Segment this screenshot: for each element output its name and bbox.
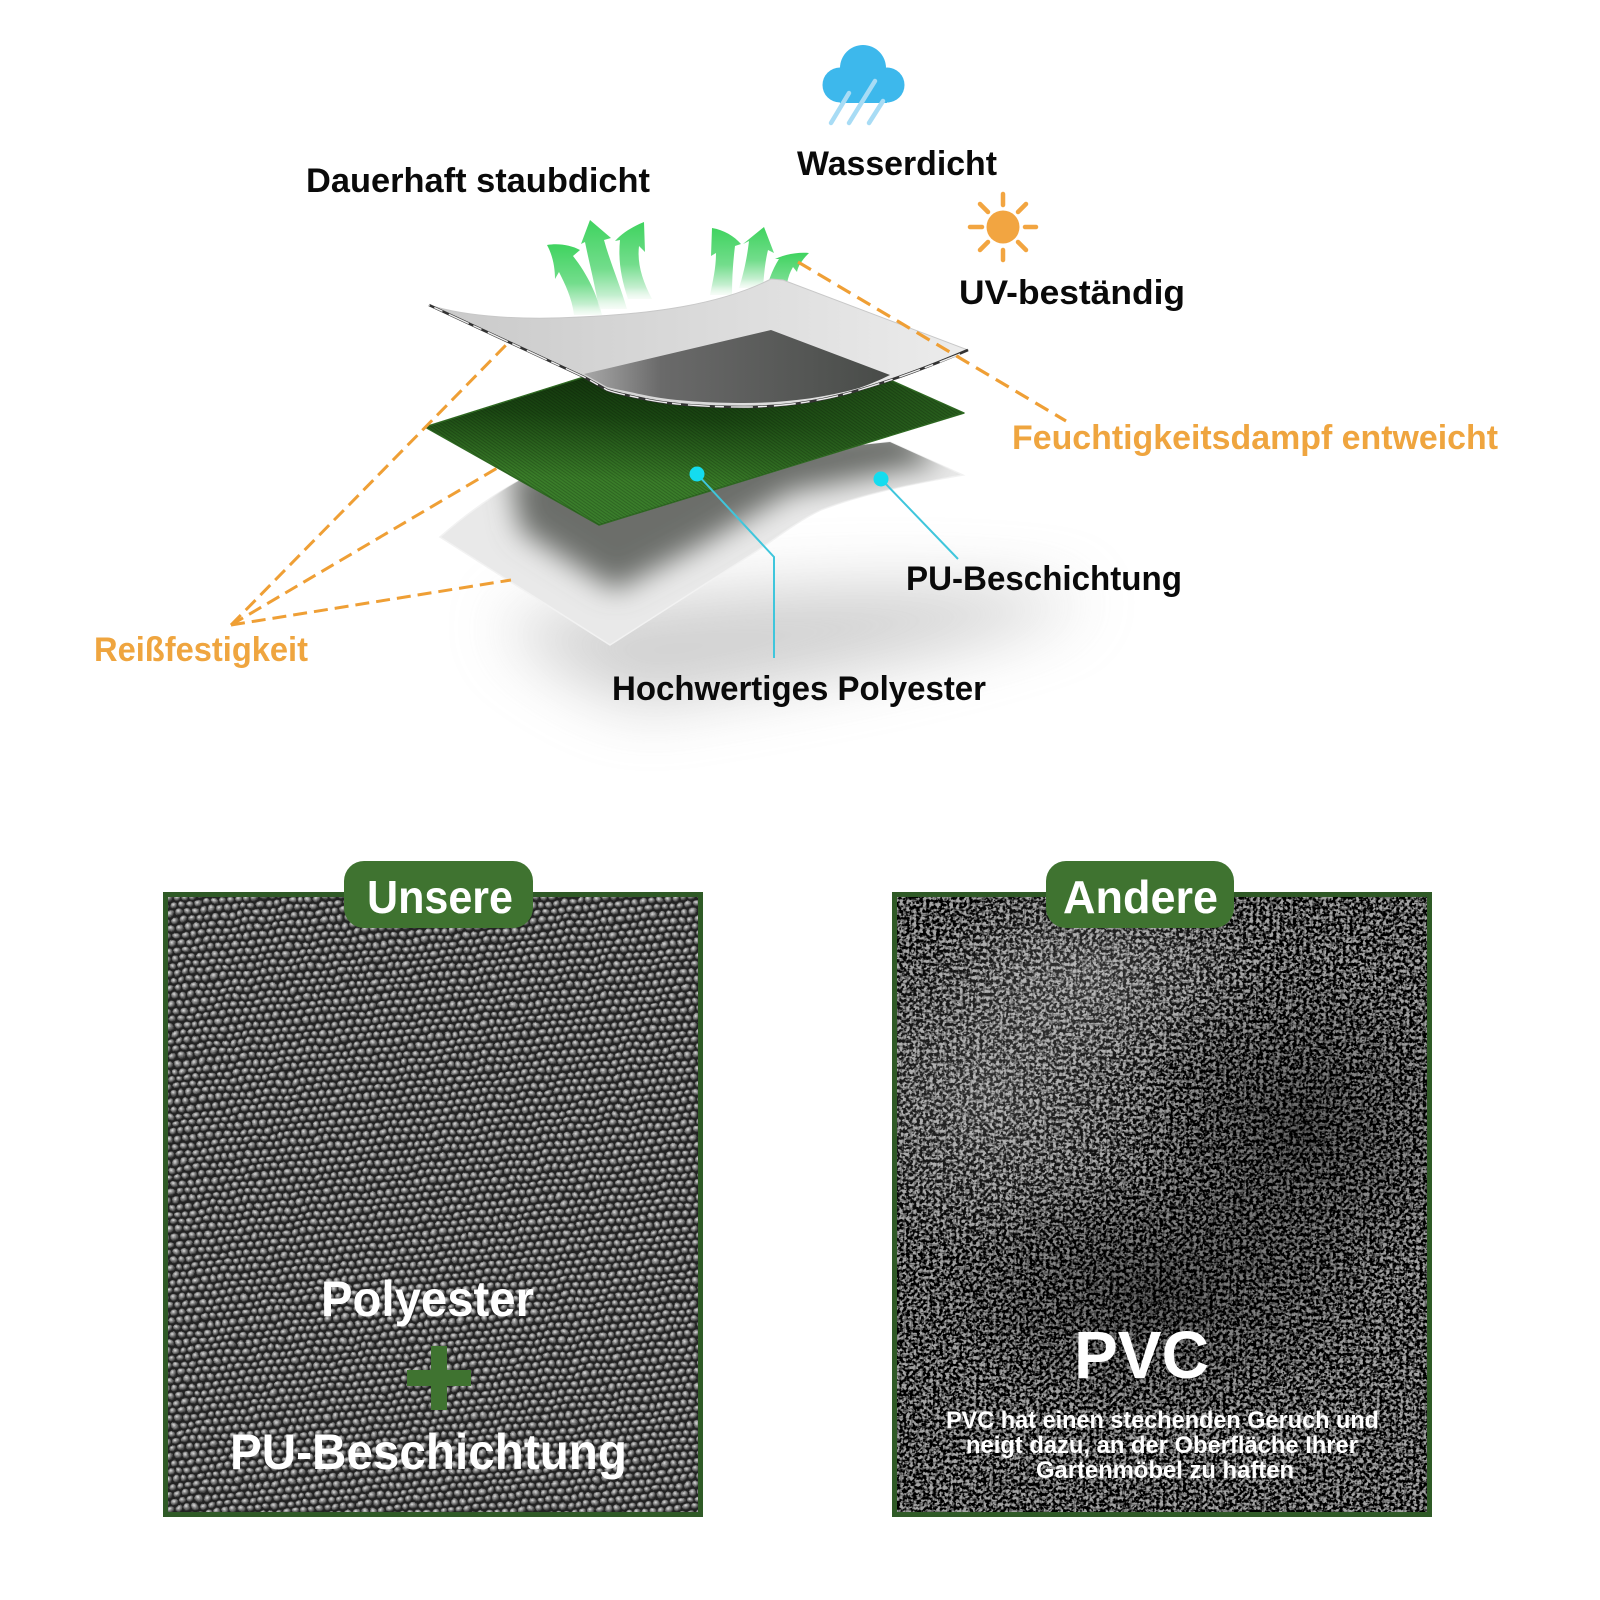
text: PVC description: PVC hat einen stechenden Geruch und	[946, 1407, 1379, 1434]
tag: Andere: Andere	[1063, 871, 1218, 923]
text: PU-Beschichtung: PU-Beschichtung	[230, 1424, 627, 1480]
layer: top waterproof membrane sheet	[429, 279, 968, 407]
green vapor arrows	[547, 220, 809, 315]
cyan pointer: PU coating	[874, 472, 958, 559]
text: PVC: PVC	[1074, 1318, 1209, 1393]
icon: sun	[970, 194, 1036, 260]
label: Hochwertiges Polyester: Hochwertiges Polyester	[612, 670, 986, 708]
tag: Unsere	[344, 861, 533, 928]
text: PVC description: neigt dazu, an der Oberfläche Ihrer	[966, 1432, 1358, 1459]
panel: Andere	[892, 861, 1432, 1517]
label: UV-beständig: UV-beständig	[959, 274, 1185, 312]
label: Feuchtigkeitsdampf entweicht: Feuchtigkeitsdampf entweicht	[1012, 419, 1498, 457]
text: PVC description	[946, 1407, 1379, 1484]
tag: Andere	[1046, 861, 1234, 928]
dashed lines: vapor callout	[798, 262, 1066, 421]
icon: plus	[407, 1346, 471, 1410]
layer: bottom PU coating sheet	[440, 425, 963, 645]
text: Polyester: Polyester	[321, 1271, 534, 1327]
label: PU-Beschichtung: PU-Beschichtung	[906, 560, 1182, 598]
panel: Unsere	[158, 861, 708, 1522]
label: Reißfestigkeit: Reißfestigkeit	[94, 631, 308, 669]
dashed lines: tear resistance callout	[231, 342, 511, 625]
icon: rain cloud	[822, 45, 904, 123]
cyan pointer: polyester	[690, 466, 774, 658]
label: Dauerhaft staubdicht: Dauerhaft staubdicht	[306, 162, 650, 200]
label: Wasserdicht: Wasserdicht	[797, 145, 997, 183]
layer: green polyester sheet	[425, 377, 964, 525]
tag: Unsere: Unsere	[367, 871, 513, 923]
text: PVC description: Gartenmöbel zu haften	[1036, 1457, 1294, 1484]
ground shadow	[500, 587, 1090, 705]
